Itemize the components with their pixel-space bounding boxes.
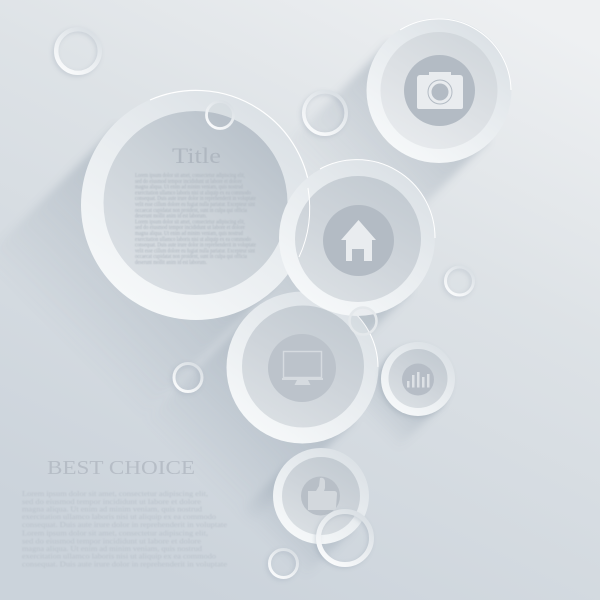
title body text: Lorem ipsum dolor sit amet, consectetur adipiscing elit, [135,173,245,179]
title body text: deserunt mollit anim id est laborum. [135,214,207,220]
icon: thumbs up [308,478,337,510]
title body text: exercitation ullamco laboris nisi ut aliquip ex ea commodo [135,190,251,196]
title heading: Title [172,143,221,168]
long shadows [0,42,488,578]
title body text: exercitation ullamco laboris nisi ut aliquip ex ea commodo [135,237,251,243]
small ring: bottom [268,550,298,579]
title ring arc seen through [299,188,310,257]
body text: best choice: magna aliqua. Ut enim ad minim veniam, quis nostrud [22,506,203,514]
body text: best choice: consequat. Duis aute irure dolor in reprehenderit in voluptate [22,560,227,568]
small ring: home/monitor junction [350,308,376,334]
small ring: on title circle [206,102,234,128]
title body text: sed do eiusmod tempor incididunt ut labore et dolore [135,225,245,231]
icon: bar chart [407,372,430,388]
body text: best choice: exercitation ullamco laboris nisi ut aliquip ex ea commodo [22,552,217,560]
panel: camera circle [366,18,512,163]
body text: best choice: exercitation ullamco laboris nisi ut aliquip ex ea commodo [22,513,217,521]
icon: home [341,220,376,261]
icon: camera [417,72,463,109]
panel: title circle [81,90,311,320]
small ring: left of monitor [172,364,202,393]
body text: best choice: sed do eiusmod tempor incididunt ut labore et dolore [22,498,201,506]
title body text: Lorem ipsum dolor sit amet, consectetur adipiscing elit, [135,219,245,225]
panel: thumb circle [273,448,369,544]
body text: best choice: consequat. Duis aute irure dolor in reprehenderit in voluptate [22,521,227,529]
panel: home circle [279,160,435,316]
small ring: right [444,267,474,296]
title body text: consequat. Duis aute irure dolor in reprehenderit in voluptate [135,196,256,202]
body text: best choice [22,490,227,568]
panel: chart circle [379,342,455,418]
panel: monitor circle [226,292,378,444]
heading: best choice: BEST CHOICE [47,457,195,479]
body text: best choice: Lorem ipsum dolor sit amet, consectetur adipiscing elit, [22,530,208,538]
small ring: between title and camera [302,92,346,136]
title body text: occaecat cupidatat non proident, sunt in culpa qui officia [135,207,247,214]
title body text: velit esse cillum dolore eu fugiat nulla pariatur. Excepteur sint [135,247,255,254]
title body text: magna aliqua. Ut enim ad minim veniam, quis nostrud [135,231,243,237]
body text: best choice: sed do eiusmod tempor incididunt ut labore et dolore [22,538,201,546]
title ring band [81,90,311,320]
body text: best choice: magna aliqua. Ut enim ad minim veniam, quis nostrud [22,545,203,553]
icon: monitor [282,352,323,385]
small ring: overlapping thumb circle [317,512,372,566]
title body text: sed do eiusmod tempor incididunt ut labore et dolore [135,179,242,185]
title body text: consequat. Duis aute irure dolor in reprehenderit in voluptate [135,243,256,249]
title disc [104,111,288,295]
title body text [135,173,256,266]
body text: best choice: Lorem ipsum dolor sit amet, consectetur adipiscing elit, [22,490,208,498]
title body text: magna aliqua. Ut enim ad minim veniam, quis nostrud [135,185,243,191]
title ring highlight [150,90,311,205]
title body text: occaecat cupidatat non proident, sunt in culpa qui officia [135,253,247,260]
title body text: deserunt mollit anim id est laborum. [135,260,207,266]
small ring: top left [54,29,100,74]
title body text: velit esse cillum dolore eu fugiat nulla pariatur. Excepteur sint [135,201,255,208]
